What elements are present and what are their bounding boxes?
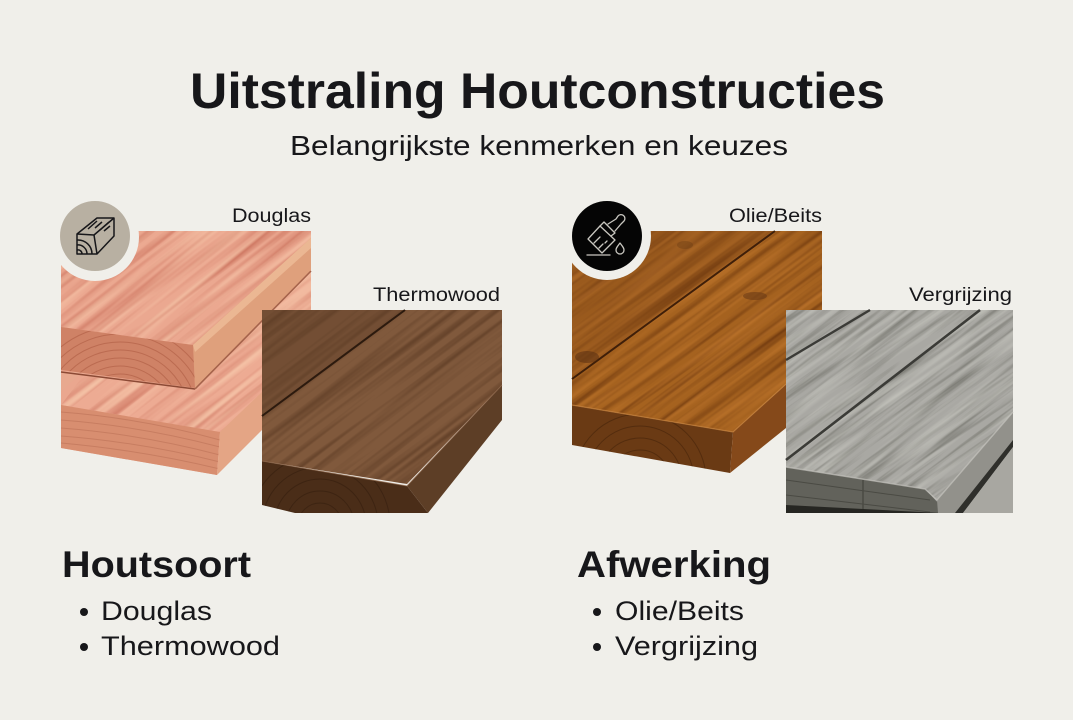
label: Olie/Beits: Olie/Beits xyxy=(729,206,822,227)
icon: paint brush xyxy=(563,192,651,280)
heading: Houtsoort: Houtsoort xyxy=(62,544,251,585)
photo: Douglas boards xyxy=(60,231,312,475)
label: Douglas: Douglas xyxy=(232,206,311,227)
subtitle: Belangrijkste kenmerken en keuzes xyxy=(290,130,788,161)
list: afwerking: Olie/Beits xyxy=(615,596,744,626)
title: Uitstraling Houtconstructies xyxy=(190,63,885,119)
panel: houtsoort images xyxy=(60,231,502,513)
label: Vergrijzing: Vergrijzing xyxy=(909,285,1012,306)
photo: olie/beits boards xyxy=(572,230,822,473)
list: afwerking: Vergrijzing xyxy=(615,631,758,661)
photo: vergrijzing boards xyxy=(785,309,1014,513)
photo: Thermowood boards xyxy=(262,309,502,513)
list: houtsoort xyxy=(80,596,280,661)
list: houtsoort: Douglas xyxy=(101,596,212,626)
icon: wood beam xyxy=(51,193,139,281)
label: Thermowood: Thermowood xyxy=(373,285,500,306)
panel: afwerking images xyxy=(572,230,1014,513)
heading: Afwerking: Afwerking xyxy=(577,544,771,585)
list: houtsoort: Thermowood xyxy=(101,631,280,661)
list: afwerking xyxy=(593,596,758,661)
